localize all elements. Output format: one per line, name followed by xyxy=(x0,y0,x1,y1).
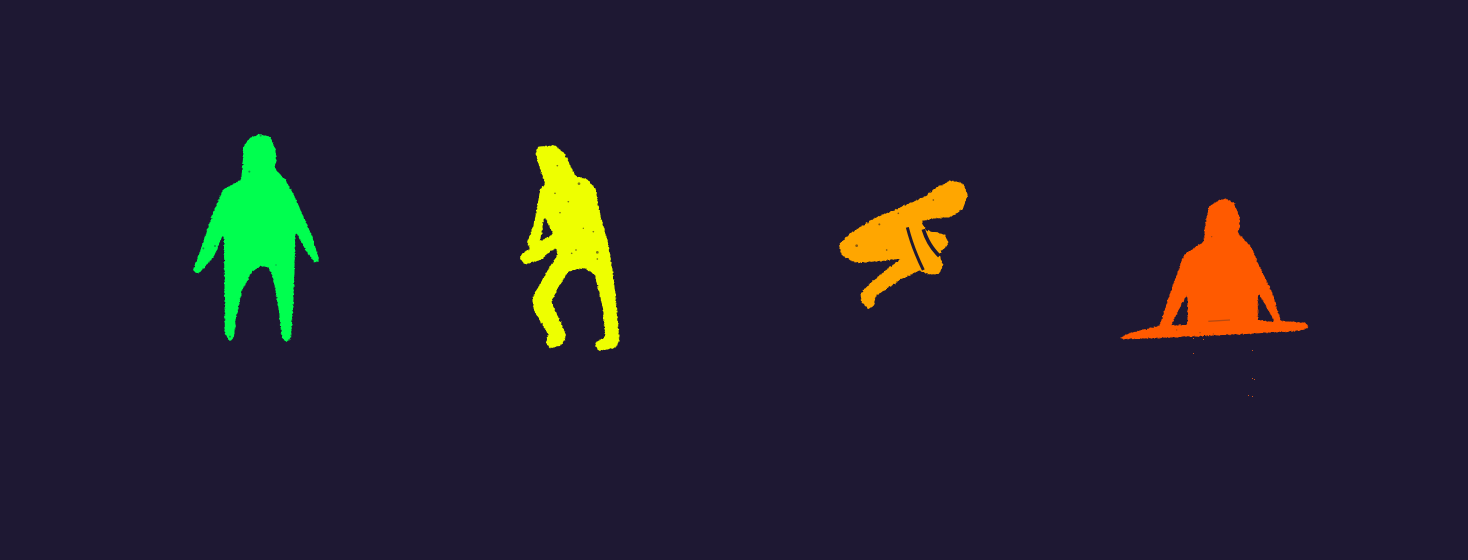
gap: strap inner line xyxy=(907,227,923,270)
figure: green standing person xyxy=(193,134,319,342)
figure: orange person behind a surface xyxy=(1119,199,1309,339)
figure: amber tumbling person xyxy=(839,181,967,309)
gap: strap outer line xyxy=(923,229,939,256)
figure: yellow crouching person xyxy=(520,146,619,351)
speckles below orange figure xyxy=(1193,338,1255,397)
